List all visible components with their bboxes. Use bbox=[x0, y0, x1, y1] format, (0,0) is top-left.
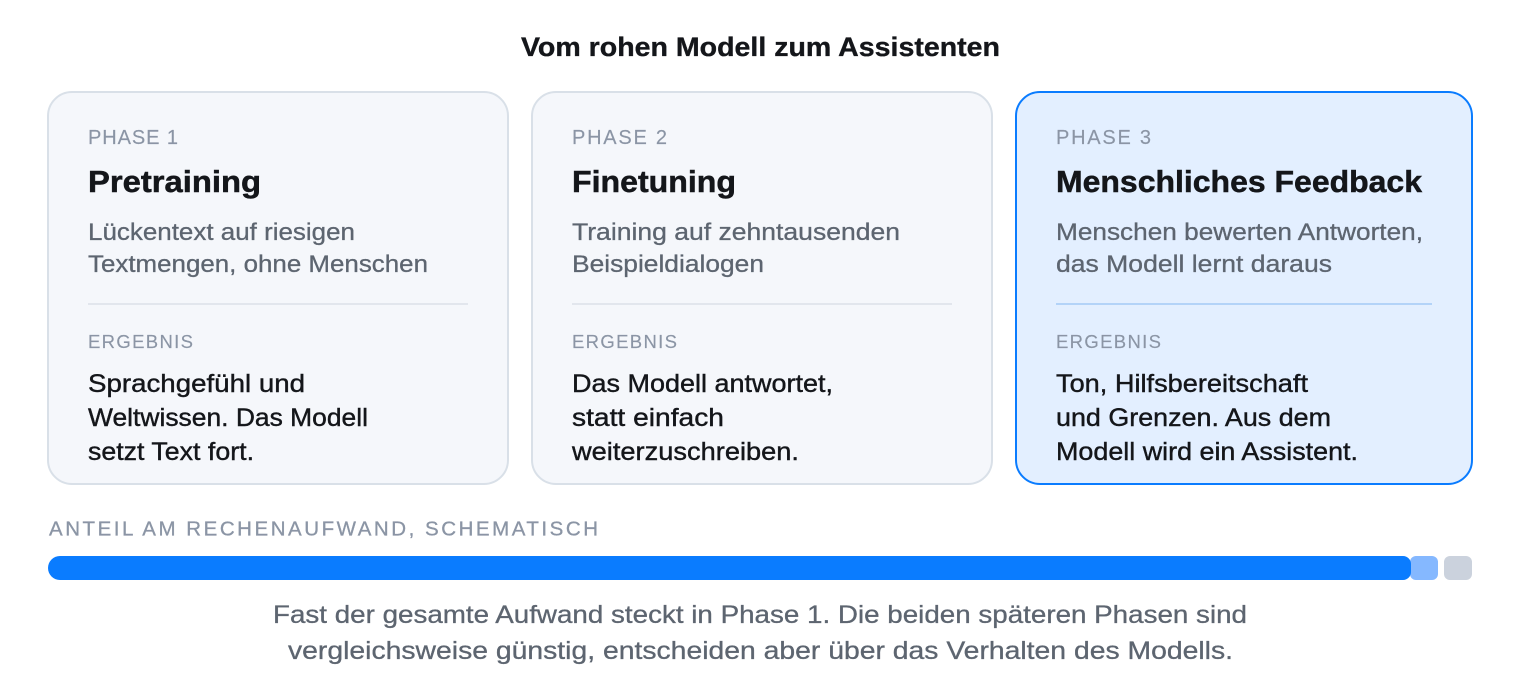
phase 3 result label: ERGEBNIS bbox=[1056, 331, 1161, 352]
phase 2 heading: Finetuning bbox=[572, 164, 736, 199]
phase 3 description: das Modell lernt daraus bbox=[1056, 251, 1332, 278]
phase 3 heading: Menschliches Feedback bbox=[1056, 164, 1423, 199]
phase 1 heading: Pretraining bbox=[88, 164, 261, 199]
phase 1 result text: Sprachgefühl und bbox=[88, 370, 305, 398]
phase 3 description bbox=[1056, 219, 1423, 278]
panel: phase 3 menschliches feedback bbox=[1016, 92, 1472, 484]
bar chart label: ANTEIL AM RECHENAUFWAND, SCHEMATISCH bbox=[49, 518, 598, 540]
phase 3 result text: Ton, Hilfsbereitschaft bbox=[1056, 370, 1308, 398]
phase 3 result text bbox=[1056, 370, 1358, 466]
panel: phase 1 pretraining bbox=[48, 92, 508, 484]
title: Vom rohen Modell zum Assistenten bbox=[521, 32, 1000, 62]
footer note: vergleichsweise günstig, entscheiden aber über das Verhalten des Modells. bbox=[288, 637, 1233, 665]
footer note bbox=[273, 601, 1247, 665]
phase 2 description bbox=[572, 219, 900, 278]
phase 1 description: Lückentext auf riesigen bbox=[88, 219, 355, 246]
phase 2 label: PHASE 2 bbox=[572, 127, 667, 149]
phase 1 result label: ERGEBNIS bbox=[88, 331, 193, 352]
phase 1 description bbox=[88, 219, 428, 278]
phase 2 result text: weiterzuschreiben. bbox=[571, 438, 799, 466]
phase 2 result text: statt einfach bbox=[572, 404, 724, 432]
phase 3 description: Menschen bewerten Antworten, bbox=[1056, 219, 1423, 246]
phase 1 result text: Weltwissen. Das Modell bbox=[88, 404, 368, 432]
phase 1 result text bbox=[88, 370, 368, 466]
panel: phase 2 finetuning bbox=[532, 92, 992, 484]
phase 2 description: Training auf zehntausenden bbox=[572, 219, 900, 246]
phase 1 label: PHASE 1 bbox=[88, 127, 178, 149]
phase 3 result text: Modell wird ein Assistent. bbox=[1056, 438, 1358, 466]
segment: phase 3 bbox=[1444, 556, 1472, 580]
phase 2 result text: Das Modell antwortet, bbox=[572, 370, 833, 398]
footer note: Fast der gesamte Aufwand steckt in Phase 1. Die beiden späteren Phasen sind bbox=[273, 601, 1247, 629]
phase 2 result text bbox=[571, 370, 833, 466]
phase 2 result label: ERGEBNIS bbox=[572, 331, 677, 352]
bar chart: share of compute bbox=[48, 556, 1472, 580]
phase 2 description: Beispieldialogen bbox=[572, 251, 764, 278]
phase 1 result text: setzt Text fort. bbox=[88, 438, 254, 466]
phase 3 label: PHASE 3 bbox=[1056, 127, 1151, 149]
phase 1 description: Textmengen, ohne Menschen bbox=[88, 251, 428, 278]
segment: phase 1 bbox=[48, 556, 1411, 580]
phase 3 result text: und Grenzen. Aus dem bbox=[1056, 404, 1331, 432]
segment: phase 2 bbox=[1410, 556, 1438, 580]
